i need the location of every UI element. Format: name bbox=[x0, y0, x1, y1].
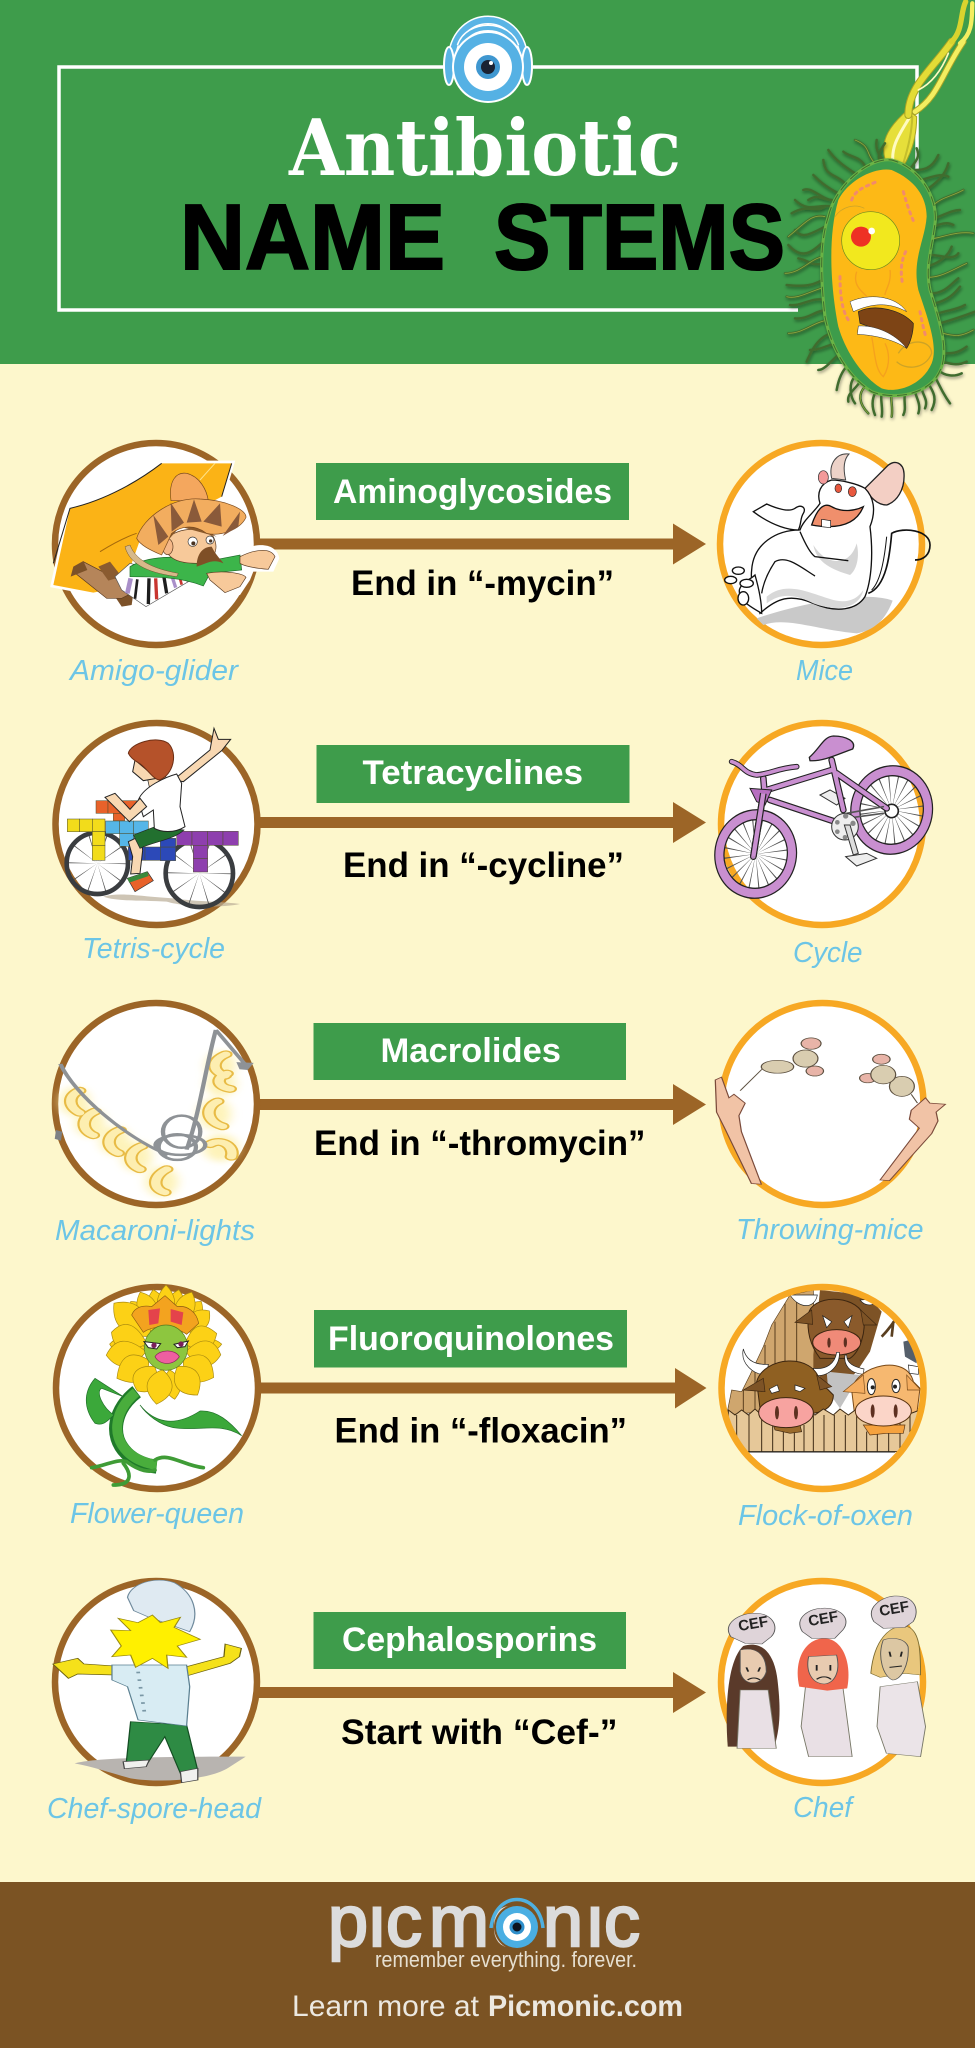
shorts bbox=[133, 827, 184, 848]
icon: flower-queen bbox=[56, 1285, 258, 1489]
heading box bbox=[316, 745, 630, 803]
right mouse bbox=[860, 1054, 917, 1103]
row: Fluoroquinolones bbox=[56, 1285, 924, 1532]
mouth bbox=[812, 505, 863, 527]
row: Macrolides bbox=[55, 1003, 945, 1247]
back fence bbox=[727, 1290, 815, 1415]
label: Tetris-cycle: Tetris-cycle bbox=[82, 933, 225, 965]
top ox bbox=[813, 1290, 882, 1395]
rule text: End in “-floxacin” bbox=[334, 1412, 627, 1450]
pedal back bbox=[820, 790, 845, 805]
crown bbox=[132, 1296, 199, 1334]
heading box: Aminoglycosides bbox=[333, 473, 612, 511]
dots bbox=[840, 182, 926, 336]
face bbox=[163, 529, 216, 563]
shadow bbox=[757, 597, 893, 633]
tusks bbox=[813, 1352, 839, 1376]
arrow bbox=[255, 1672, 706, 1713]
label: Flower-queen: Flower-queen bbox=[70, 1498, 244, 1530]
hat lettering: CEF bbox=[807, 1608, 839, 1630]
glow bbox=[60, 1051, 238, 1197]
face bbox=[144, 1325, 188, 1370]
glider wing bbox=[53, 463, 232, 593]
frame bbox=[732, 760, 887, 857]
tail bbox=[868, 530, 930, 593]
arrow bbox=[255, 1368, 706, 1408]
big ear bbox=[865, 462, 904, 505]
sombrero bbox=[170, 473, 208, 501]
row: Aminoglycosides bbox=[53, 443, 930, 687]
icon: eye with headphones logo bbox=[444, 20, 532, 103]
footer band bbox=[0, 1882, 975, 2048]
boy arm raised bbox=[173, 728, 231, 782]
title line 2: STEMS bbox=[494, 185, 785, 289]
label: Chef: Chef bbox=[793, 1792, 855, 1824]
front fence bbox=[728, 1409, 920, 1452]
tail bbox=[882, 1320, 895, 1337]
leg bbox=[128, 836, 143, 874]
body bbox=[751, 480, 874, 613]
shirt bbox=[130, 555, 242, 586]
roots bbox=[92, 1457, 203, 1485]
hat bbox=[128, 1580, 195, 1632]
heading box: Tetracyclines bbox=[362, 754, 583, 792]
left snout bbox=[773, 1425, 802, 1433]
hands halo bbox=[207, 545, 279, 597]
title line 2: NAME bbox=[180, 185, 445, 289]
front wheel bbox=[713, 809, 798, 899]
chef 1 bbox=[727, 1613, 780, 1748]
heading box bbox=[314, 1612, 626, 1669]
flagellum bbox=[884, 2, 972, 172]
body bbox=[831, 169, 934, 390]
title line 1: Antibiotic bbox=[288, 103, 681, 194]
neck and shirt bbox=[147, 773, 168, 790]
arms bbox=[53, 1658, 115, 1678]
right arm bbox=[880, 1098, 945, 1181]
heading box: Cephalosporins bbox=[342, 1621, 597, 1659]
header band bbox=[0, 0, 975, 364]
orange ox bbox=[852, 1364, 920, 1412]
row: Tetracyclines bbox=[56, 723, 934, 969]
membrane bbox=[822, 160, 944, 396]
arrow bbox=[255, 1084, 706, 1125]
left leaf bbox=[86, 1378, 123, 1424]
hand arm bbox=[105, 793, 147, 822]
left ox bbox=[757, 1361, 833, 1413]
pants bbox=[126, 1722, 198, 1773]
icon: tetris-cycle bbox=[56, 723, 258, 925]
petals bbox=[105, 1285, 222, 1406]
label: Macaroni-lights: Macaroni-lights bbox=[55, 1215, 255, 1247]
macaroni inner bbox=[71, 1054, 232, 1192]
title line 2 bbox=[180, 185, 785, 289]
hat lettering: CEF bbox=[737, 1613, 769, 1635]
arm and leg lines bbox=[800, 532, 848, 561]
icon: chef bbox=[721, 1581, 926, 1783]
rear wheel bbox=[849, 765, 934, 855]
illustration: bacterium mascot bbox=[785, 2, 975, 417]
right leaf bbox=[140, 1405, 242, 1436]
eye bbox=[842, 212, 900, 270]
head bbox=[133, 760, 157, 781]
shoes bbox=[123, 1760, 198, 1783]
mouth bbox=[858, 308, 913, 348]
chainring bbox=[832, 813, 858, 840]
wheels bbox=[82, 848, 113, 879]
footer link text bbox=[292, 1990, 683, 2023]
logo wordmark: picmonic bbox=[328, 1882, 640, 1962]
left mouse bbox=[740, 1038, 824, 1091]
poncho bbox=[115, 563, 188, 607]
hair highlights bbox=[785, 140, 973, 417]
row: Cephalosporins bbox=[47, 1580, 926, 1825]
nose, eyes bbox=[818, 471, 828, 484]
stem bbox=[116, 1392, 157, 1467]
footer link text: Picmonic.com bbox=[488, 1990, 683, 2023]
label: Flock-of-oxen: Flock-of-oxen bbox=[738, 1500, 913, 1532]
heading box bbox=[314, 1023, 626, 1080]
icon: chef-spore-head bbox=[53, 1580, 257, 1783]
ground shadow bbox=[103, 894, 240, 906]
label: Throwing-mice: Throwing-mice bbox=[736, 1214, 924, 1246]
icon: logo eye bbox=[491, 1900, 543, 1950]
hairs bbox=[785, 140, 975, 417]
macaroni outer bbox=[71, 1054, 232, 1192]
icon: cycle bbox=[713, 723, 934, 925]
spiky head bbox=[111, 1615, 200, 1668]
heading box bbox=[316, 463, 629, 520]
icon: amigo-glider bbox=[53, 443, 279, 645]
left horn bbox=[743, 1349, 768, 1375]
icon: throwing-mice bbox=[715, 1003, 945, 1205]
icon: macaroni-lights bbox=[55, 1003, 257, 1205]
hat lettering: CEF bbox=[878, 1598, 910, 1620]
shadow bbox=[75, 1757, 246, 1781]
arrow bbox=[255, 802, 706, 843]
legs bbox=[115, 593, 133, 607]
chef 3 bbox=[871, 1596, 926, 1757]
wires bbox=[60, 1030, 246, 1160]
label: Amigo-glider: Amigo-glider bbox=[68, 655, 239, 687]
heading box: Fluoroquinolones bbox=[328, 1320, 614, 1358]
tagline: remember everything. forever. bbox=[375, 1947, 637, 1972]
foot bbox=[739, 575, 762, 613]
tetris blocks bbox=[67, 801, 238, 872]
rule text: Start with “Cef-” bbox=[341, 1713, 618, 1752]
icon: flock-of-oxen bbox=[722, 1287, 924, 1489]
left arm bbox=[715, 1077, 761, 1184]
shoe bbox=[127, 872, 153, 892]
heading box bbox=[314, 1310, 627, 1368]
arrow bbox=[255, 524, 706, 564]
coat bbox=[112, 1665, 190, 1726]
raised hand bbox=[753, 504, 804, 530]
small ear bbox=[831, 454, 849, 480]
label: Mice: Mice bbox=[796, 655, 853, 687]
footer link text: Learn more at bbox=[292, 1990, 480, 2023]
title frame bbox=[59, 67, 917, 310]
heading box: Macrolides bbox=[380, 1032, 561, 1070]
icon: mice bbox=[720, 443, 930, 645]
label: Chef-spore-head: Chef-spore-head bbox=[47, 1793, 262, 1825]
rule text: End in “-mycin” bbox=[351, 564, 614, 603]
crank pedal bbox=[844, 825, 858, 855]
hands bbox=[240, 550, 275, 569]
rule text: End in “-thromycin” bbox=[314, 1124, 646, 1163]
hat lettering bbox=[737, 1598, 910, 1635]
saddle bbox=[809, 736, 854, 761]
rule text: End in “-cycline” bbox=[343, 846, 624, 885]
label: Cycle: Cycle bbox=[793, 937, 862, 969]
orange mouth and snout bbox=[863, 1425, 905, 1435]
chef 2 bbox=[798, 1608, 852, 1757]
